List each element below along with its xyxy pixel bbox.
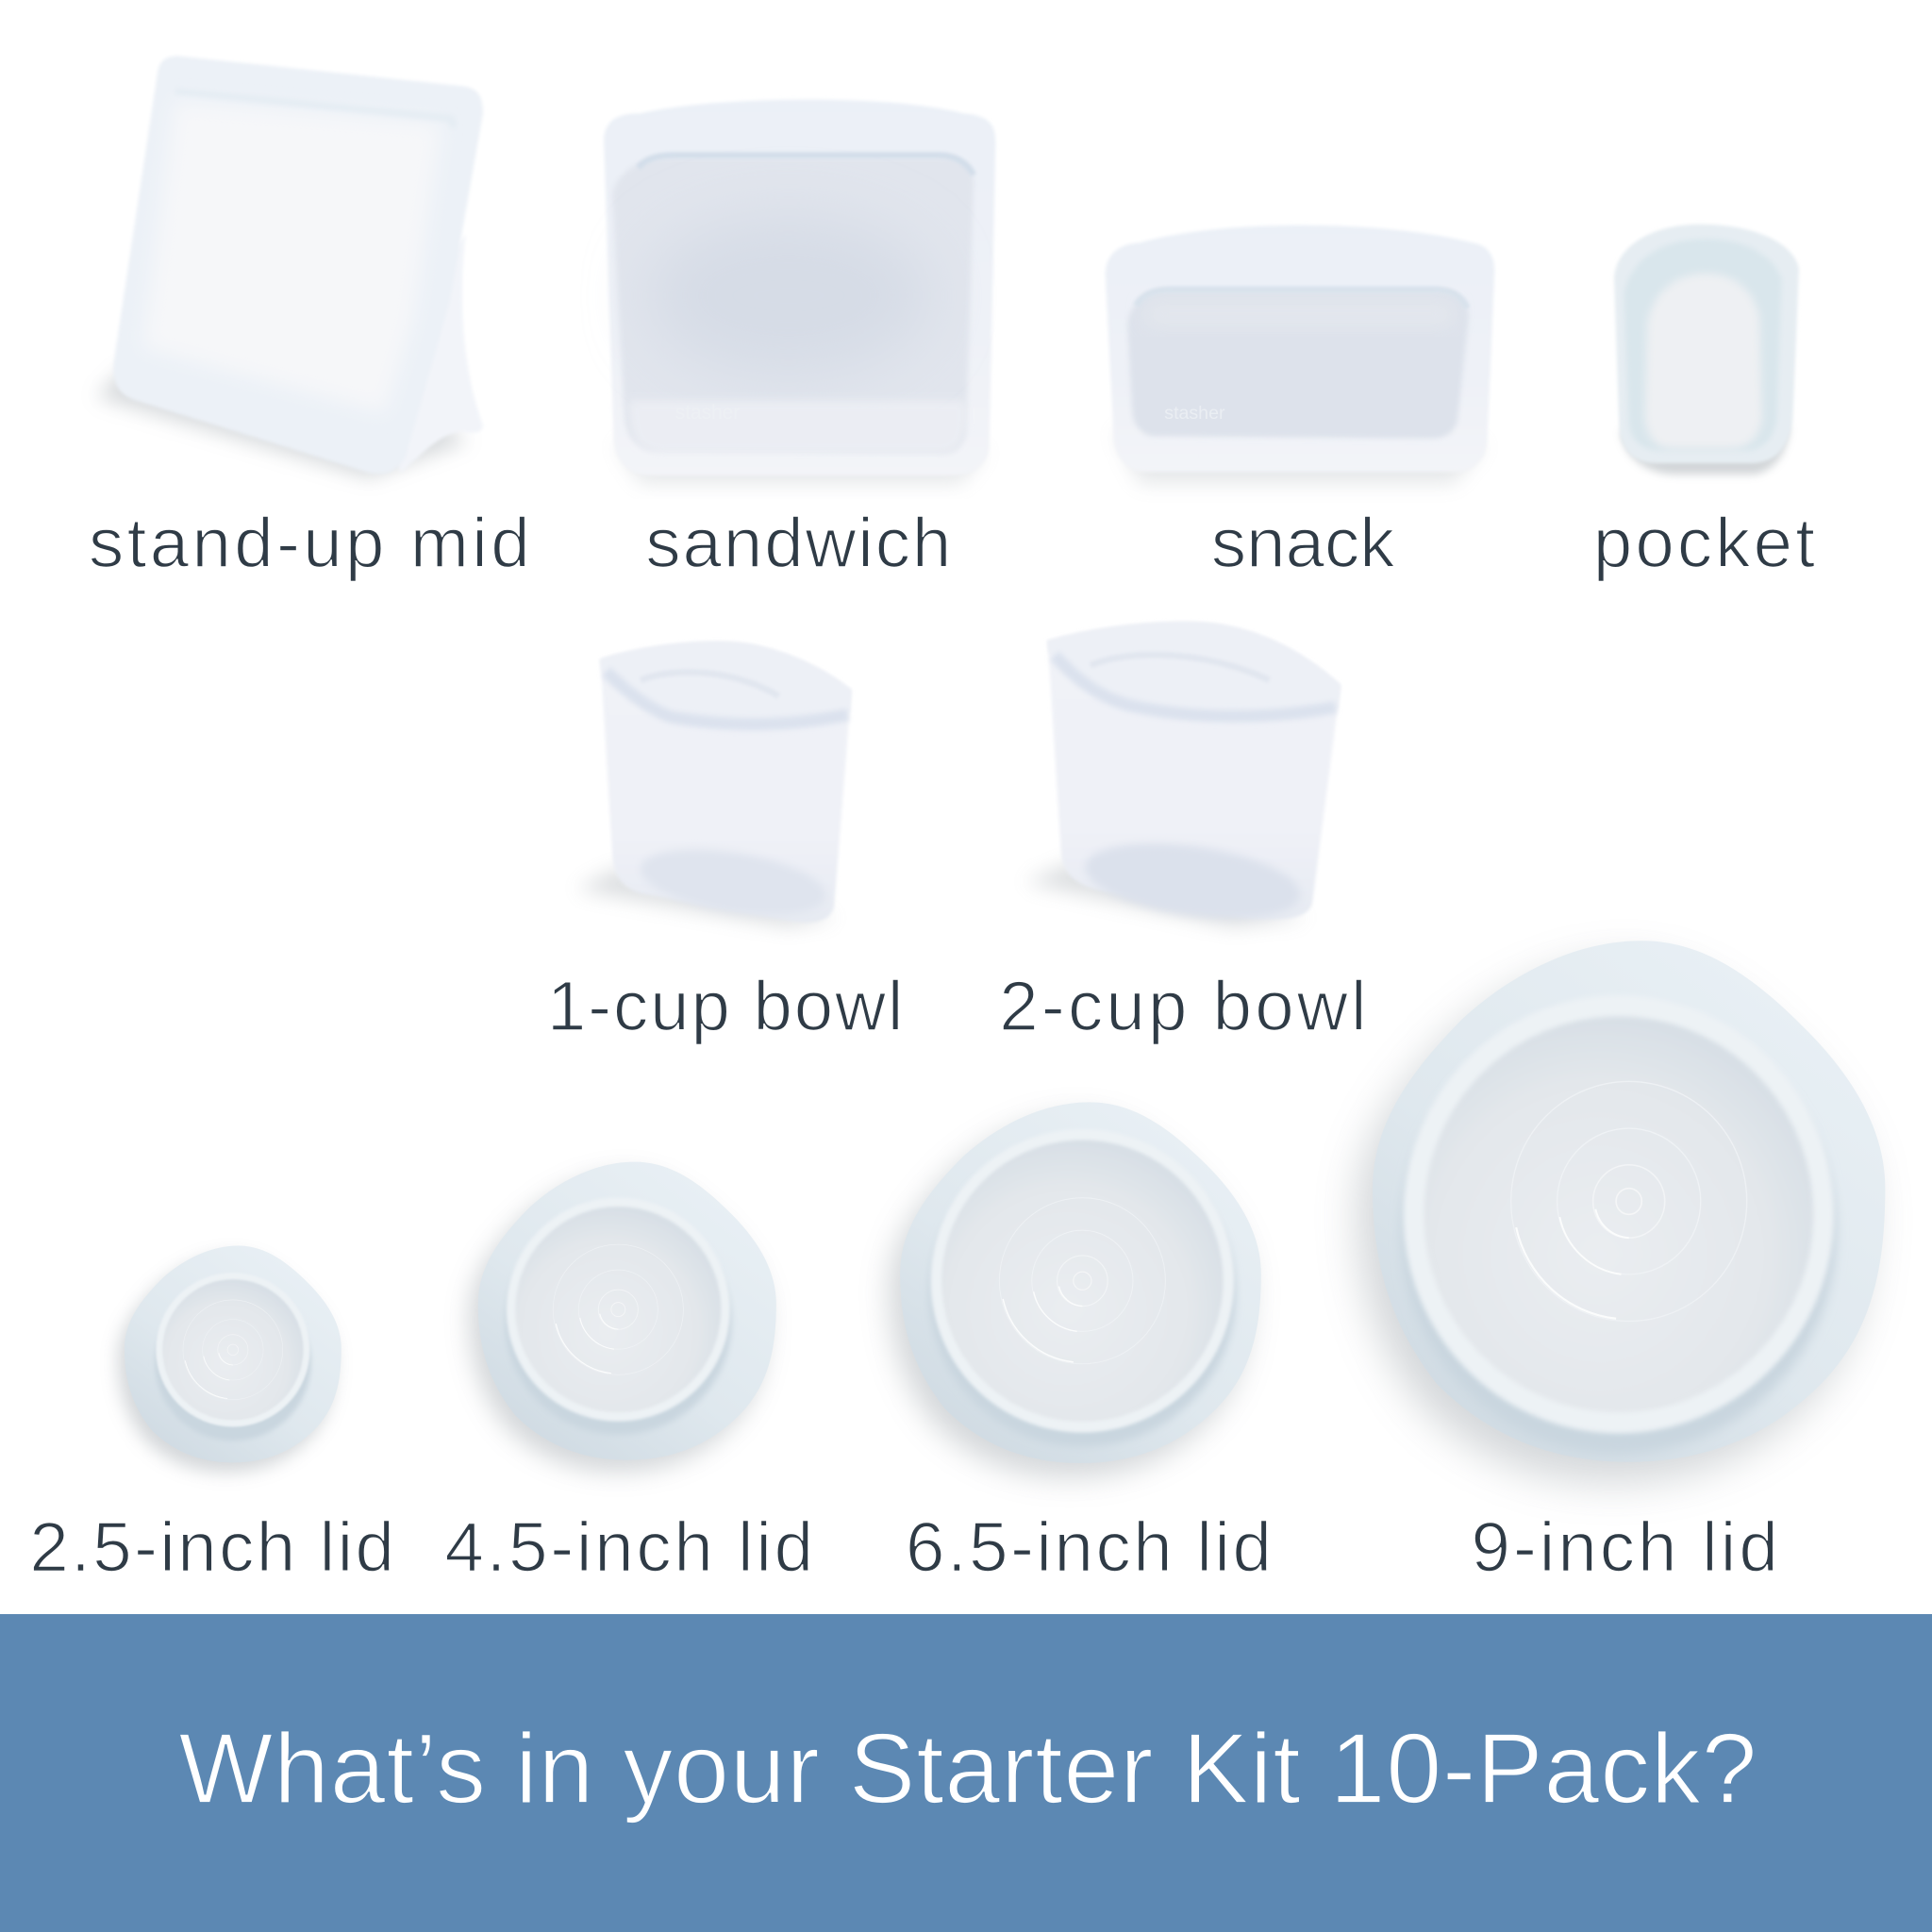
shadow: pocket bbox=[1621, 425, 1789, 475]
lid art: 2.5-inch bbox=[118, 1245, 341, 1473]
lid art: 4.5-inch bbox=[469, 1162, 776, 1472]
product: 6.5-inch lid bbox=[890, 1102, 1272, 1586]
product: pocket bag bbox=[1593, 225, 1815, 582]
bag window: pocket bbox=[1645, 274, 1762, 448]
label: 6.5-inch lid: 6.5-inch lid bbox=[906, 1507, 1272, 1586]
bag window: sandwich bbox=[612, 158, 974, 454]
label: 2-cup bowl: 2-cup bowl bbox=[999, 967, 1366, 1045]
seal highlight: stand-up mid bbox=[175, 92, 453, 128]
label: sandwich: sandwich bbox=[645, 504, 951, 582]
shadow: 1-cup bowl bbox=[576, 869, 838, 926]
shadow: sandwich bbox=[616, 443, 986, 483]
banner bbox=[0, 1614, 1932, 1932]
seal far edge: 1-cup bbox=[641, 673, 778, 696]
seal far edge: 2-cup bbox=[1091, 655, 1269, 680]
shadow: stand-up mid bbox=[96, 370, 468, 478]
label: stand-up mid: stand-up mid bbox=[89, 504, 530, 582]
seal: 1-cup bbox=[607, 672, 848, 724]
bowl base: 2-cup bbox=[1080, 832, 1305, 930]
seal line: sandwich bbox=[639, 156, 974, 175]
product: snack bag bbox=[1106, 225, 1494, 582]
logo: snack: stasher bbox=[1164, 403, 1225, 424]
window top light: snack bbox=[1146, 302, 1454, 326]
label: 9-inch lid: 9-inch lid bbox=[1472, 1507, 1778, 1586]
product: 2-cup bowl bbox=[999, 622, 1366, 1045]
seal: 2-cup bbox=[1055, 656, 1336, 716]
lid art: 9-inch bbox=[1357, 941, 1885, 1483]
bowl base: 1-cup bbox=[636, 839, 830, 926]
shadow: snack bbox=[1115, 431, 1485, 483]
label: snack: snack bbox=[1211, 504, 1395, 582]
lid flap: 1-cup bbox=[600, 641, 852, 723]
label: 2.5-inch lid: 2.5-inch lid bbox=[29, 1507, 394, 1586]
bag window: snack bbox=[1127, 291, 1469, 439]
banner background bbox=[0, 1614, 1932, 1932]
bag body: stand-up mid bbox=[113, 56, 483, 474]
bowl body: 1-cup bbox=[600, 641, 852, 923]
window shade: sandwich bbox=[647, 216, 930, 375]
product: stand-up mid bag bbox=[89, 56, 530, 582]
logo: sandwich: stasher bbox=[675, 402, 740, 424]
bag body: snack bbox=[1106, 225, 1494, 472]
bag body: sandwich bbox=[604, 99, 995, 475]
gusset: stand-up mid back bbox=[370, 234, 483, 474]
label: 1-cup bowl: 1-cup bowl bbox=[547, 967, 903, 1045]
banner title: What’s in your Starter Kit 10-Pack? bbox=[178, 1713, 1757, 1824]
shadow: 2-cup bowl bbox=[1025, 862, 1308, 926]
lid flap: 2-cup bbox=[1047, 622, 1341, 717]
bag window: stand-up mid bbox=[143, 101, 441, 413]
lid art: 6.5-inch bbox=[890, 1102, 1261, 1477]
label: pocket: pocket bbox=[1593, 504, 1815, 582]
bowl body: 2-cup bbox=[1047, 622, 1341, 920]
product: 4.5-inch lid bbox=[445, 1162, 813, 1586]
product: 9-inch lid bbox=[1357, 941, 1885, 1586]
seal: pocket bbox=[1624, 239, 1782, 451]
window lower light: sandwich bbox=[628, 400, 966, 454]
product: 1-cup bowl bbox=[547, 641, 903, 1045]
seal line: snack bbox=[1136, 290, 1468, 308]
product: 2.5-inch lid bbox=[29, 1245, 394, 1586]
label: 4.5-inch lid: 4.5-inch lid bbox=[445, 1507, 813, 1586]
product: sandwich bag bbox=[604, 99, 995, 582]
bag body: pocket bbox=[1614, 225, 1799, 463]
